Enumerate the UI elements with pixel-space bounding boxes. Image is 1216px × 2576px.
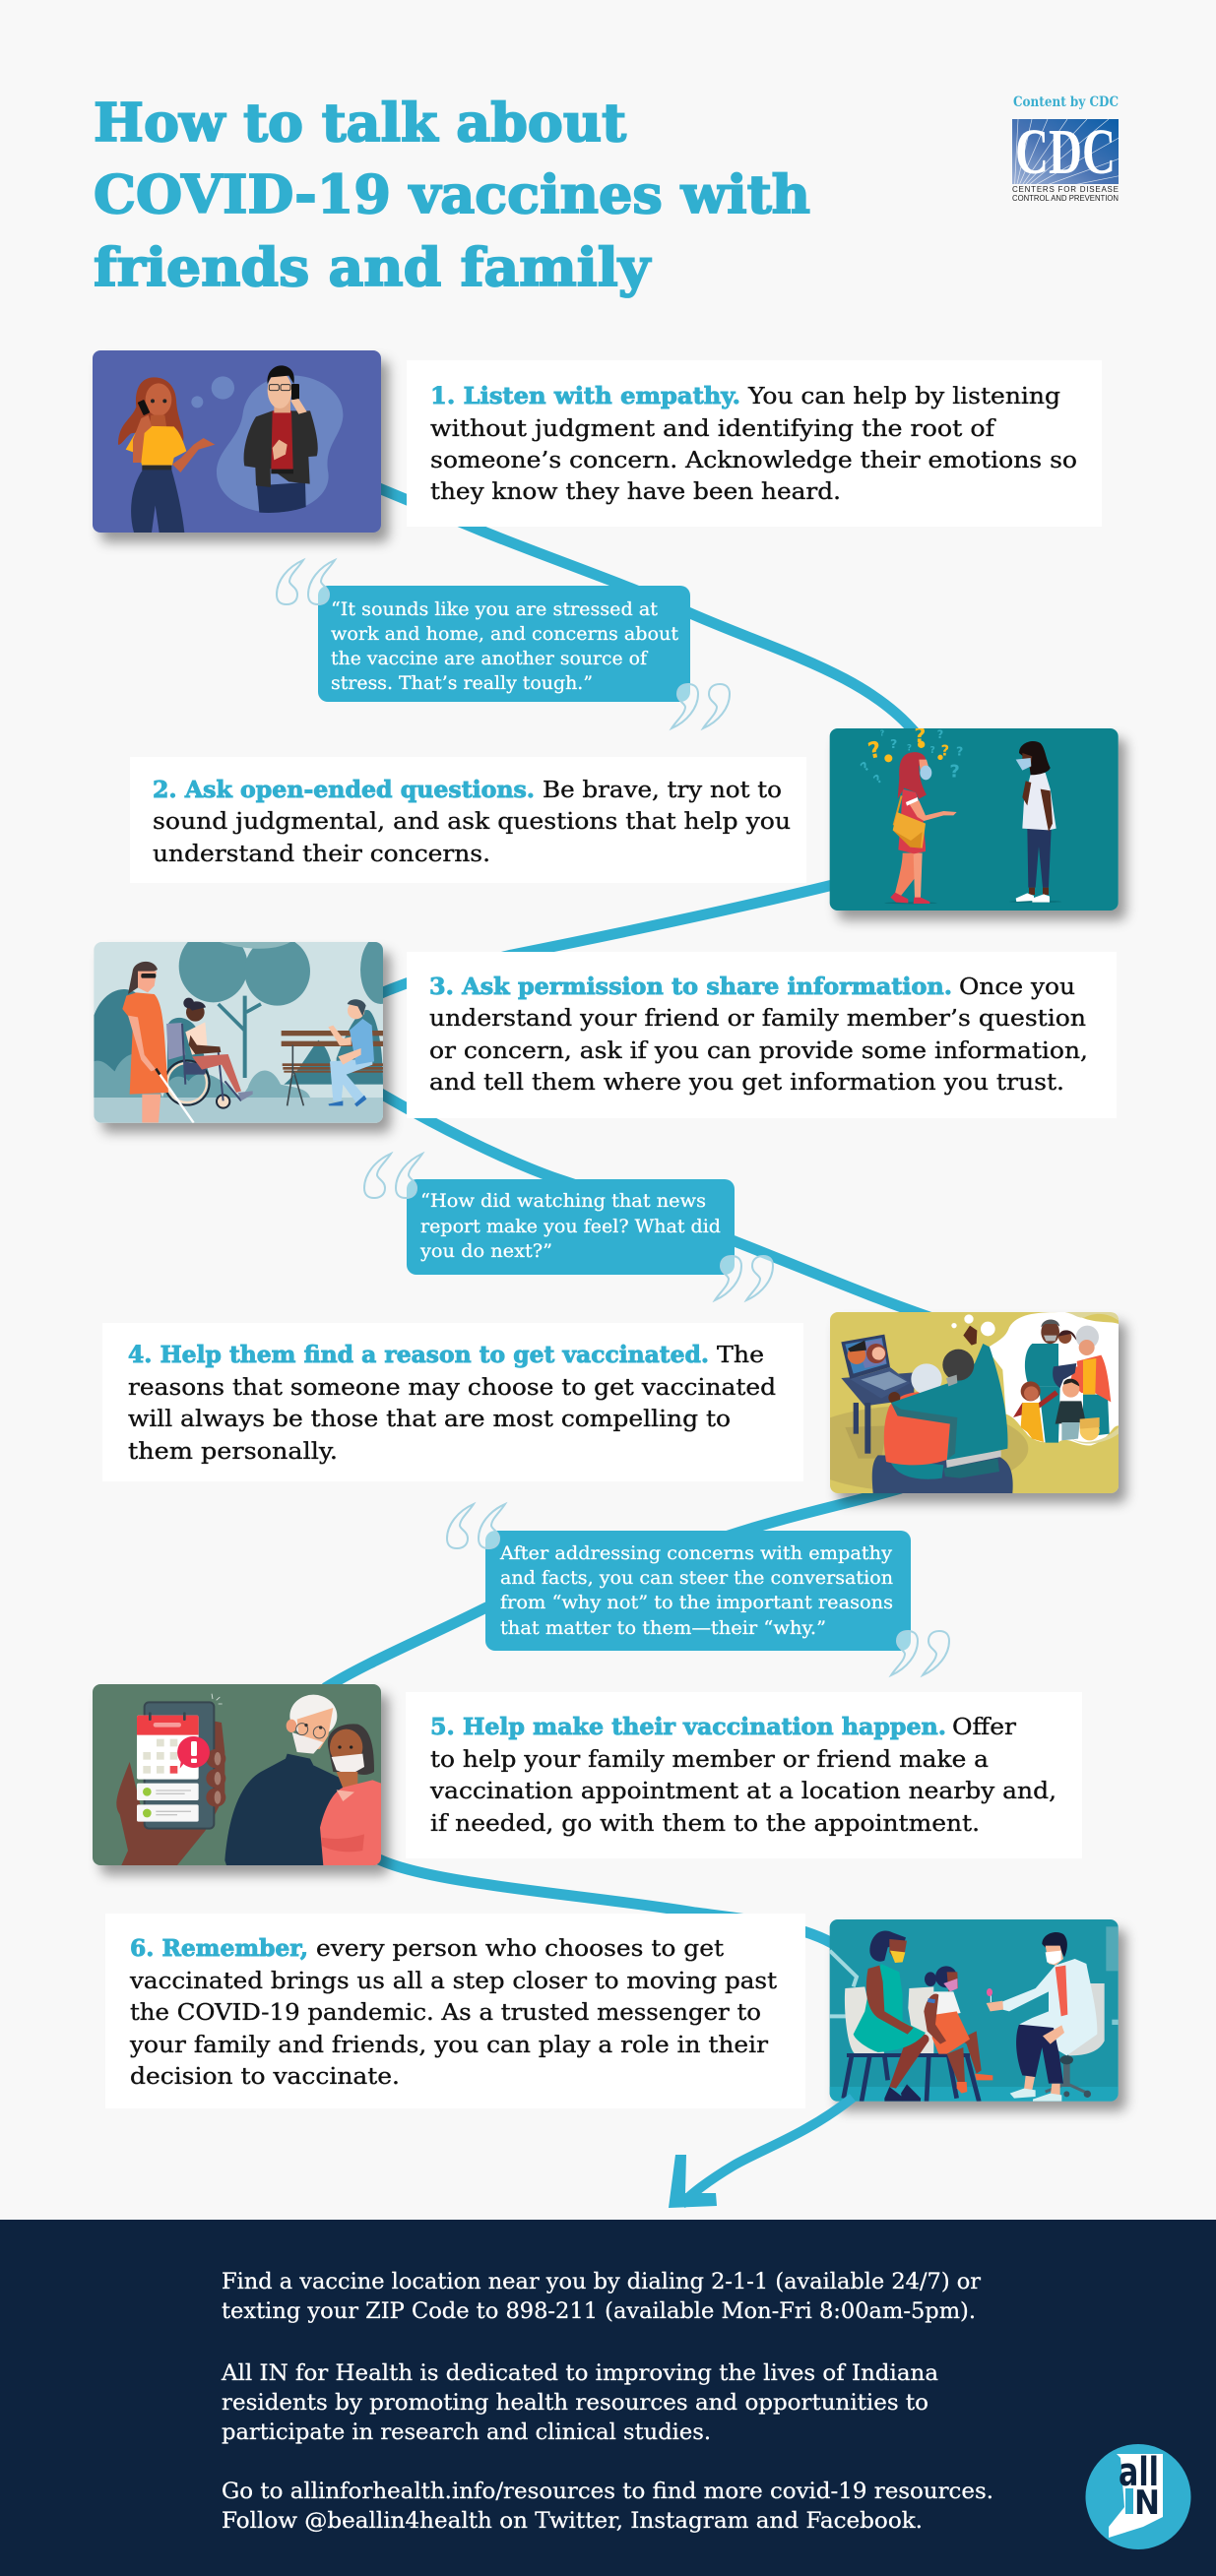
step 4 body: The [717, 1341, 764, 1368]
step 1 body: someone’s concern. Acknowledge their emotions so [430, 446, 1077, 473]
footer: about All IN for Health: participate in research and clinical studies. [222, 2420, 711, 2445]
step 6 body: decision to vaccinate. [130, 2062, 400, 2090]
quote callout 3: and facts, you can steer the conversation [500, 1568, 893, 1589]
step 3 body: Once you [959, 973, 1075, 1000]
step 1 body: without judgment and identifying the root of [430, 414, 996, 442]
connecting ribbon path [325, 486, 935, 1946]
step 4 body: reasons that someone may choose to get vaccinated [128, 1373, 776, 1401]
footer: find a vaccine [222, 2270, 981, 2324]
CDC credit and logo: CONTROL AND PREVENTION [1012, 194, 1119, 203]
step 3 body [429, 973, 1088, 1096]
illustration: two masked women with question marks: ? [956, 743, 963, 758]
step 2 body [153, 776, 791, 867]
quote callout 3: After addressing concerns with empathy [499, 1543, 893, 1564]
footer: about All IN for Health [221, 2361, 938, 2445]
step 5 body: to help your family member or friend make a [430, 1745, 989, 1773]
All IN logo: all [1119, 2450, 1159, 2495]
quote callout 1 [277, 560, 730, 728]
illustration: two masked women with question marks: ? [929, 745, 935, 756]
title [94, 93, 810, 298]
step 6 heading: 6. Remember, [130, 1934, 308, 1962]
step 2 body: understand their concerns. [153, 840, 490, 867]
quote callout 3: that matter to them—their “why.” [500, 1618, 826, 1639]
illustration: two masked women with question marks: ? [858, 758, 872, 775]
illustration: two masked women with question marks [830, 723, 1119, 911]
footer: more resources [222, 2480, 993, 2534]
illustration: two people on phones [93, 350, 381, 533]
illustration: two masked women with question marks: ? [914, 723, 926, 747]
closing quote marks [891, 1631, 949, 1675]
text panel: step 3 [407, 952, 1117, 1118]
CDC name: CENTERS FOR DISEASE [1012, 185, 1119, 194]
step 5 body: Offer [952, 1713, 1017, 1740]
step 1 body [430, 382, 1077, 505]
opening quote marks [447, 1504, 505, 1548]
All IN logo [1085, 2444, 1191, 2549]
step 1 body: You can help by listening [747, 382, 1060, 409]
footer: about All IN for Health: All IN for Health is dedicated to improving the lives of Indiana [221, 2361, 938, 2386]
step 3 heading: 3. Ask permission to share information. [429, 973, 952, 1000]
quote callout 3 [447, 1504, 949, 1675]
quote callout 1: work and home, and concerns about [331, 624, 679, 645]
quote callout 2 [364, 1154, 773, 1300]
closing quote marks [715, 1256, 773, 1300]
step 6 body [129, 1934, 778, 2090]
step 2 body: sound judgmental, and ask questions that help you [153, 807, 791, 835]
illustration: two masked women with question marks: ? [949, 761, 960, 782]
step 2 body: Be brave, try not to [543, 776, 782, 803]
title: COVID-19 vaccines with [94, 164, 810, 225]
opening quote marks [364, 1154, 422, 1198]
title: How to talk about [94, 93, 627, 154]
footer: more resources: Follow @beallin4health on Twitter, Instagram and Facebook. [222, 2509, 923, 2534]
closing quote marks [672, 684, 730, 728]
step 1 heading: 1. Listen with empathy. [430, 382, 740, 409]
arrow pointing to footer [669, 2098, 853, 2208]
illustration: phone calendar and masked couple [93, 1684, 381, 1865]
step 5 heading: 5. Help make their vaccination happen. [430, 1713, 946, 1740]
illustration: grandparents on video call thinking of family [794, 1312, 1119, 1493]
step 4 body: will always be those that are most compelling to [128, 1405, 731, 1432]
illustration: two masked women with question marks: ? [941, 742, 949, 759]
quote callout 1: the vaccine are another source of [331, 649, 648, 669]
footer: find a vaccine: texting your ZIP Code to 898-211 (available Mon-Fri 8:00am-5pm). [222, 2299, 976, 2324]
illustration: family at vaccination visit [830, 1919, 1119, 2102]
step 4 body: them personally. [128, 1437, 338, 1465]
step 6 body: every person who chooses to get [316, 1934, 725, 1962]
text panel: step 1 [407, 360, 1102, 527]
step 5 body [429, 1713, 1056, 1837]
illustration: two masked women with question marks: ? [865, 737, 884, 765]
illustration: two masked women with question marks: ? [870, 772, 885, 786]
quote callout 1: “It sounds like you are stressed at [331, 599, 659, 620]
footer: about All IN for Health: residents by promoting health resources and opportunities to [222, 2391, 928, 2416]
step 5 body: vaccination appointment at a location nearby and, [429, 1777, 1056, 1804]
step 6 body: vaccinated brings us all a step closer to moving past [129, 1967, 778, 1994]
illustration: two masked women with question marks: ? [907, 744, 912, 754]
illustration: people in a park [94, 930, 401, 1124]
quote callout 2: “How did watching that news [420, 1191, 706, 1212]
step 2 heading: 2. Ask open-ended questions. [153, 776, 535, 803]
illustration: two masked women with question marks: ? [937, 727, 943, 741]
footer: more resources: Go to allinforhealth.info/resources to find more covid-19 resources. [222, 2480, 993, 2504]
quote callout 1: stress. That’s really tough.” [331, 673, 593, 694]
text panel: step 4 [102, 1323, 803, 1481]
quote callout 2: you do next?” [419, 1241, 552, 1262]
step 3 body: or concern, ask if you can provide some information, [429, 1037, 1088, 1064]
All IN logo: N [1134, 2483, 1160, 2523]
footer panel [0, 2220, 1216, 2576]
illustration: two masked women with question marks: ? [890, 736, 897, 751]
step 4 body [128, 1341, 776, 1465]
step 5 body: if needed, go with them to the appointment. [430, 1809, 980, 1837]
footer: find a vaccine: Find a vaccine location near you by dialing 2-1-1 (available 24/7) or [222, 2270, 981, 2294]
step 6 body: the COVID-19 pandemic. As a trusted messenger to [130, 1998, 761, 2026]
step 1 body: they know they have been heard. [430, 477, 841, 505]
step 3 body: and tell them where you get information you trust. [429, 1068, 1064, 1096]
step 4 heading: 4. Help them find a reason to get vaccinated. [128, 1341, 709, 1368]
illustration: two masked women with question marks: ? [880, 728, 885, 737]
text panel: step 5 [406, 1692, 1082, 1858]
CDC logo mark: CDC [1015, 116, 1116, 188]
step 6 body: your family and friends, you can play a role in their [129, 2031, 769, 2058]
text panel: step 6 [105, 1914, 805, 2108]
step 3 body: understand your friend or family member’s question [429, 1004, 1086, 1032]
CDC credit and logo [1012, 94, 1122, 203]
text panel: step 2 [130, 757, 806, 883]
quote callout 2: report make you feel? What did [420, 1217, 721, 1237]
opening quote marks [277, 560, 335, 604]
title: friends and family [94, 237, 652, 298]
quote callout 3: from “why not” to the important reasons [500, 1593, 893, 1613]
credit text: Content by CDC [1013, 94, 1119, 110]
